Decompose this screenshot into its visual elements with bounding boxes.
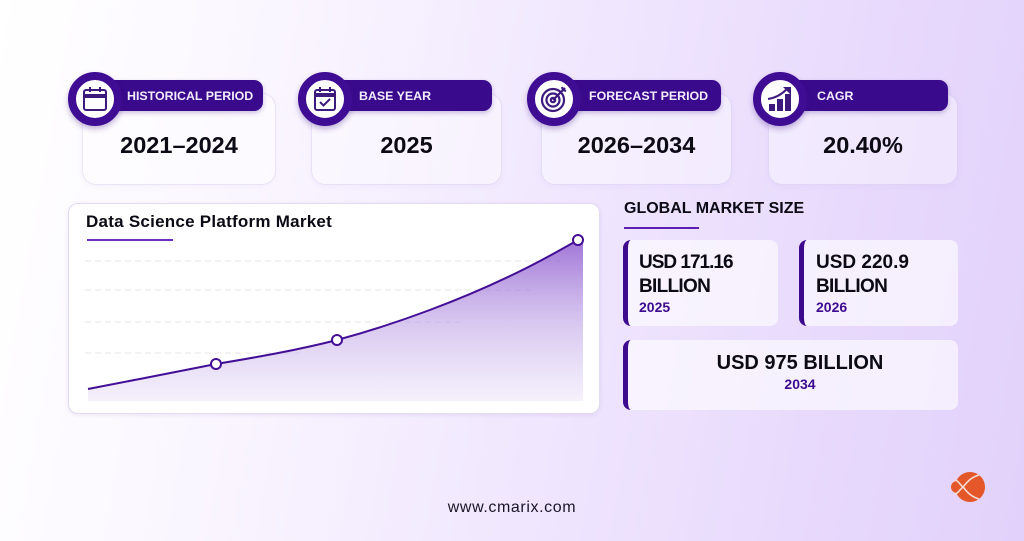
stat: 2026 market size: 2026 bbox=[816, 299, 847, 315]
label pill bbox=[323, 80, 492, 111]
icon: brand logo bbox=[951, 472, 985, 502]
title underline bbox=[87, 239, 173, 241]
card: base year bbox=[294, 72, 502, 185]
stat: 2026 market size: BILLION bbox=[816, 276, 887, 297]
label pill bbox=[778, 80, 948, 111]
icon: calendar with check bbox=[298, 72, 352, 126]
icon: rising bars bbox=[753, 72, 807, 126]
icon: calendar bbox=[68, 72, 122, 126]
panel: line chart bbox=[68, 203, 600, 414]
area chart bbox=[85, 234, 584, 401]
value panel bbox=[541, 93, 732, 185]
label pill: FORECAST PERIOD bbox=[589, 89, 708, 103]
label pill bbox=[93, 80, 263, 111]
heading: global market size: GLOBAL MARKET SIZE bbox=[624, 200, 804, 217]
stat: 2026 market size: USD 220.9 bbox=[816, 252, 909, 273]
stat: 2025 market size: BILLION bbox=[639, 276, 710, 297]
label pill: HISTORICAL PERIOD bbox=[127, 89, 253, 103]
label pill: BASE YEAR bbox=[359, 89, 431, 103]
stat: 2034 market size: USD 975 BILLION bbox=[717, 352, 883, 374]
card: CAGR bbox=[750, 72, 957, 185]
stat: 2034 market size: 2034 bbox=[784, 376, 816, 392]
heading underline bbox=[624, 227, 699, 229]
value panel: 2026–2034 bbox=[578, 132, 695, 158]
chart title: Data Science Platform Market bbox=[86, 212, 332, 231]
value panel bbox=[311, 93, 502, 185]
stat: 2026 market size bbox=[799, 240, 958, 326]
value panel bbox=[768, 93, 958, 185]
card: historical period bbox=[64, 72, 276, 185]
value panel: 2021–2024 bbox=[120, 132, 238, 158]
stat: 2025 market size: 2025 bbox=[639, 299, 670, 315]
footer url: www.cmarix.com bbox=[448, 499, 576, 516]
label pill bbox=[552, 80, 721, 111]
stat: 2025 market size: USD 171.16 bbox=[639, 252, 733, 273]
value panel: 2025 bbox=[380, 132, 433, 158]
value panel: 20.40% bbox=[823, 132, 903, 158]
stat: 2034 market size bbox=[623, 340, 958, 410]
value panel bbox=[82, 93, 276, 185]
card: forecast period bbox=[524, 72, 732, 185]
icon: target with arrow bbox=[527, 72, 581, 126]
stat: 2025 market size bbox=[623, 240, 778, 326]
label pill: CAGR bbox=[817, 89, 853, 103]
